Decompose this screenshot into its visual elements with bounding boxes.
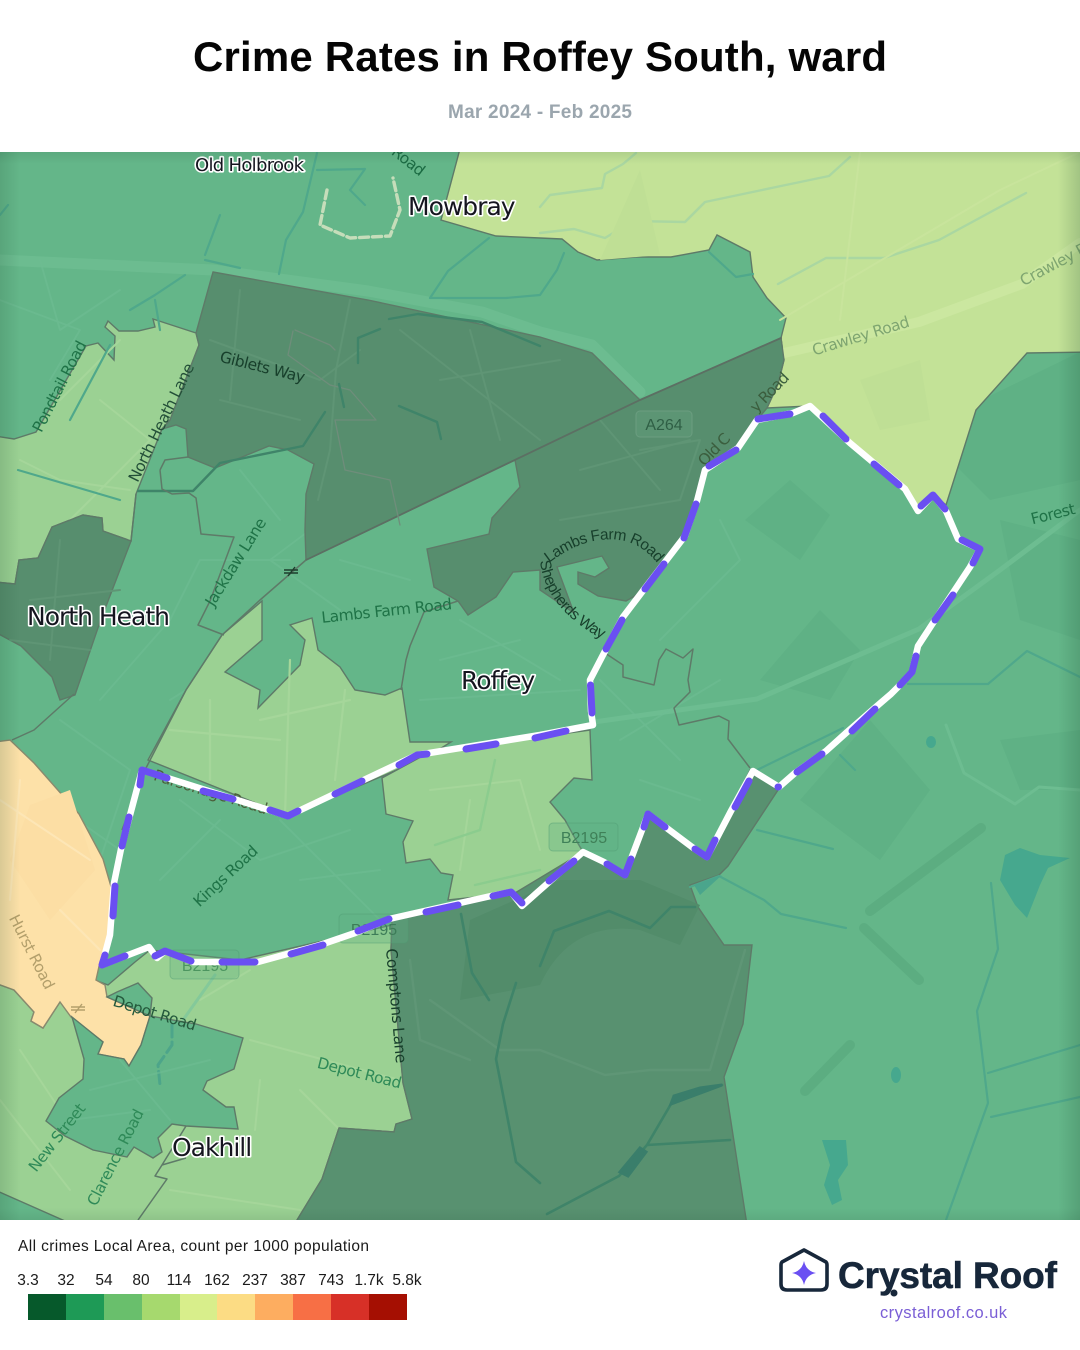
ward boundary: Roffey South xyxy=(102,406,980,965)
legend scale values: 114 xyxy=(167,1272,192,1289)
road number: A264 xyxy=(636,411,692,437)
icon: railway station south xyxy=(71,1004,85,1013)
icon: railway station north xyxy=(284,567,298,576)
region: crawley road low-rate area xyxy=(441,145,1080,512)
legend scale values: 743 xyxy=(318,1272,344,1289)
road labels: Lambs Farm Road xyxy=(544,529,665,562)
map edge vignette xyxy=(0,152,1080,1220)
region: north central high-density crime shading xyxy=(138,272,784,615)
road labels: Pondtail Road xyxy=(29,338,90,435)
road labels: Forest xyxy=(1029,500,1077,528)
legend scale values xyxy=(17,1272,422,1289)
legend scale values: 387 xyxy=(280,1272,306,1289)
legend colour ramp xyxy=(28,1294,407,1320)
road labels xyxy=(10,152,1080,1204)
road labels: Depot Road xyxy=(111,992,198,1034)
legend scale values: 32 xyxy=(57,1272,75,1289)
road labels: Hurst Road xyxy=(5,912,58,992)
road number: B2195 centre: B2195 xyxy=(351,922,397,939)
place label: Mowbray: Mowbray xyxy=(408,192,516,221)
road labels: Parsonage Road xyxy=(152,766,269,818)
road number: B2195 west xyxy=(170,950,239,979)
legend scale values: 80 xyxy=(132,1272,150,1289)
legend scale values: 237 xyxy=(242,1272,268,1289)
legend title: All crimes Local Area, count per 1000 population xyxy=(18,1238,369,1255)
legend scale values: 54 xyxy=(95,1272,113,1289)
legend scale values: 3.3 xyxy=(17,1272,39,1289)
road labels: Road xyxy=(388,143,428,180)
road number: B2195 centre xyxy=(339,914,408,943)
road number: B2195 east: B2195 xyxy=(561,830,607,847)
region: roffey lower-rate pocket xyxy=(148,601,451,816)
road labels: Crawley Road xyxy=(810,313,911,359)
region: north heath high-rate area xyxy=(0,515,131,700)
logo: Crystal Roof xyxy=(781,1250,1058,1322)
road number: A264: A264 xyxy=(645,417,683,434)
map area: administrative boundary lines xyxy=(12,457,750,1220)
road labels: Comptons Lane xyxy=(382,948,410,1063)
place label: Roffey: Roffey xyxy=(461,666,536,695)
road labels: Jackdaw Lane xyxy=(201,515,270,610)
region: southern high-rate woodland xyxy=(294,770,778,1225)
road number: B2195 east xyxy=(549,823,618,851)
wordmark: Crystal Roof xyxy=(838,1255,1058,1296)
road labels: Old Country Road xyxy=(694,369,792,470)
place label: North Heath: North Heath xyxy=(27,602,169,631)
place label: Old Holbrook: Old Holbrook xyxy=(195,155,305,176)
road labels: Giblets Way xyxy=(218,348,307,386)
road labels: Shepherds Way xyxy=(540,560,606,639)
title: Crime Rates in Roffey South, ward xyxy=(193,33,887,80)
map area: field and road texture xyxy=(39,259,1068,1096)
road labels: New Street xyxy=(25,1100,89,1175)
region: horsham high-rate area xyxy=(0,740,150,1066)
legend scale values: 1.7k xyxy=(354,1272,384,1289)
road labels: North Heath Lane xyxy=(125,361,198,485)
subtitle: date range: Mar 2024 - Feb 2025 xyxy=(448,102,632,123)
road labels: Lambs Farm Road xyxy=(321,595,452,627)
map area: streams and ponds xyxy=(0,153,1080,1220)
wordmark tail dot xyxy=(890,1290,898,1296)
region: lower-rate area in the northwest xyxy=(0,319,199,584)
road labels: Kings Road xyxy=(190,842,261,911)
region: oakhill mid-rate area xyxy=(46,983,243,1158)
legend scale values: 162 xyxy=(204,1272,230,1289)
region: oakhill lower-rate area xyxy=(0,925,412,1225)
road labels: Clarence Road xyxy=(84,1107,147,1209)
legend scale values: 5.8k xyxy=(392,1272,422,1289)
place label: Oakhill: Oakhill xyxy=(172,1133,251,1162)
road number: B2195 west: B2195 xyxy=(182,958,228,975)
road labels: Depot Road xyxy=(315,1054,403,1092)
icon: house with star xyxy=(781,1250,827,1290)
region: lower-rate pocket south of roffey xyxy=(382,730,592,900)
website link: crystalroof.co.uk xyxy=(880,1304,1008,1322)
legend xyxy=(17,1238,422,1320)
